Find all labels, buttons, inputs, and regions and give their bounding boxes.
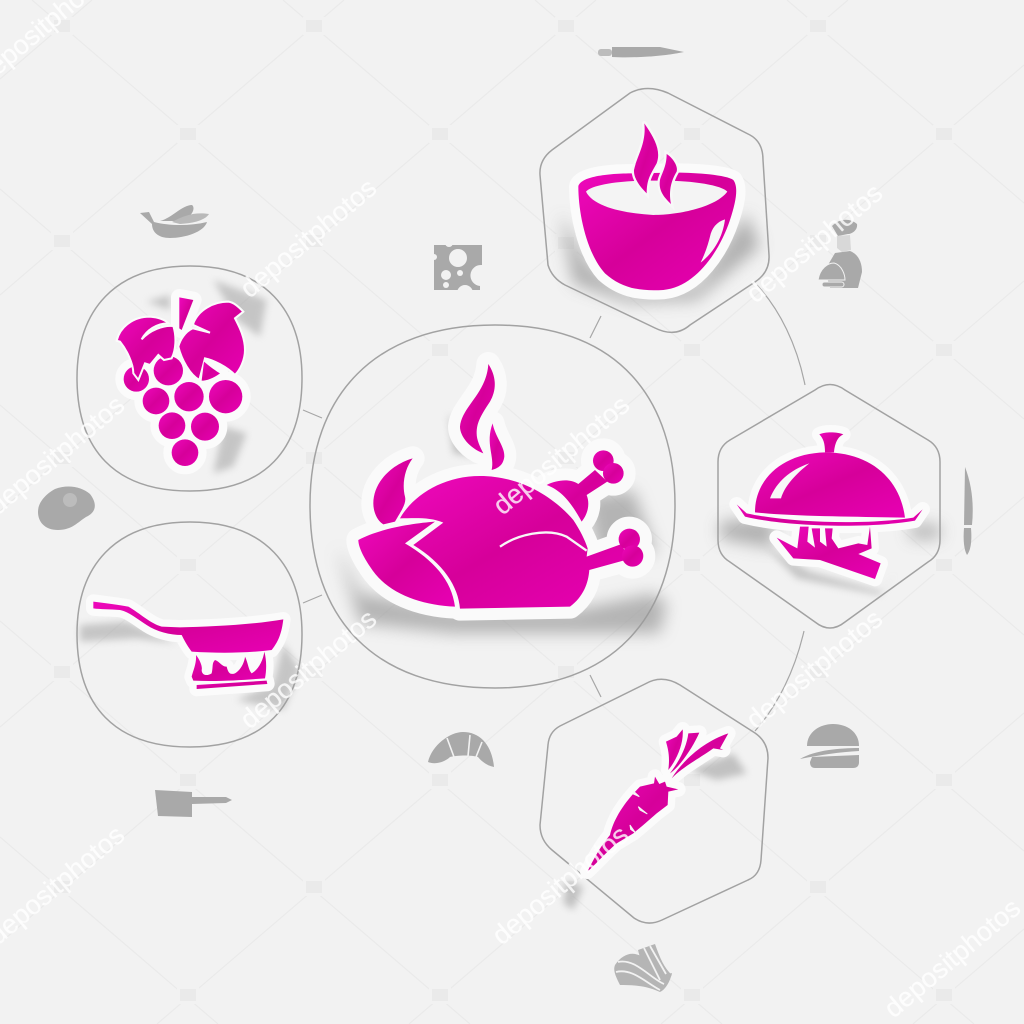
watermark text: depositphotos	[740, 604, 888, 735]
connector lines	[303, 285, 805, 731]
icon: bacon strips	[614, 944, 672, 992]
sticker icon: grapes	[117, 280, 267, 473]
sticker icon: roast chicken	[337, 364, 667, 633]
icon: kitchen knife top	[598, 47, 684, 57]
panel outline: carrot	[540, 679, 768, 923]
icon: burger	[800, 724, 859, 768]
panel outline: grapes	[77, 266, 302, 491]
sticker icon: frying pan on flame	[80, 602, 300, 710]
watermark text: depositphotos	[878, 893, 1024, 1024]
watermark text: depositphotos	[234, 604, 382, 735]
icon: meat cleaver	[155, 790, 232, 817]
watermark text: depositphotos	[234, 173, 382, 304]
panel outline: central chicken	[310, 325, 675, 688]
panel outline: frying pan	[77, 522, 302, 747]
icon: chef with cloche	[818, 220, 862, 288]
watermark text: depositphotos	[487, 390, 635, 521]
icon: chili peppers	[140, 205, 209, 238]
sticker icon: carrot	[563, 729, 747, 910]
icon: cheese	[431, 239, 482, 301]
icon: croissant	[428, 732, 494, 767]
sticker icon: steaming bowl	[560, 123, 760, 303]
icon: table knife right	[964, 467, 973, 555]
panel outline: bowl	[540, 88, 769, 332]
icon: fried egg	[38, 487, 95, 530]
watermark text: depositphotos	[486, 820, 634, 951]
panel outline: cloche	[718, 384, 940, 628]
sticker icon: serving cloche on hand	[720, 432, 940, 595]
watermark text: depositphotos	[740, 178, 888, 309]
